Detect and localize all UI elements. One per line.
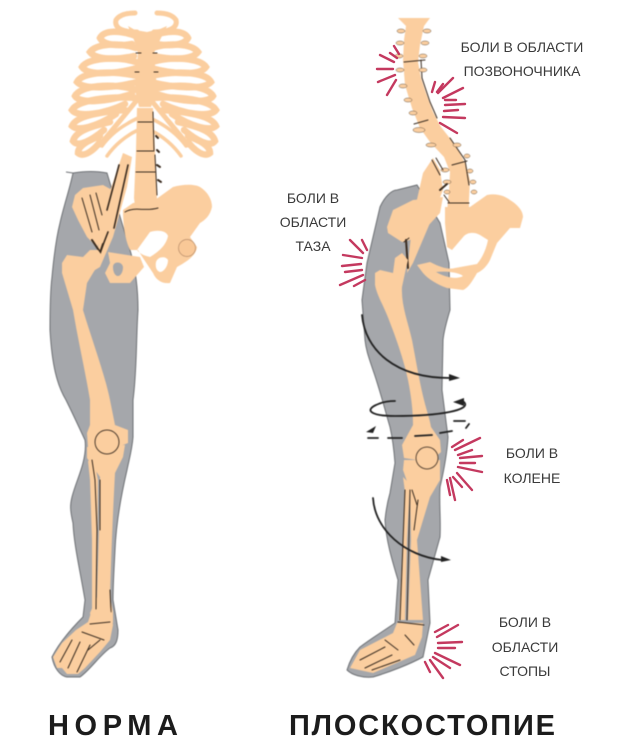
lumbar spine: normal <box>134 108 161 206</box>
pain burst: mid spine <box>432 78 465 133</box>
ilium and pelvic ring <box>417 194 523 290</box>
sternum <box>128 26 167 107</box>
pain burst: foot <box>425 625 462 678</box>
leg silhouette: normal <box>50 172 138 677</box>
label: pelvis pain: ОБЛАСТИ <box>280 214 346 230</box>
arrow: knee rotation ring <box>370 401 465 416</box>
heading: norm: НОРМА <box>48 710 178 742</box>
arrow: shin rotation <box>373 498 442 560</box>
label: knee pain: КОЛЕНЕ <box>504 470 560 486</box>
tibia: normal <box>87 430 125 623</box>
arrow: thigh rotation <box>362 315 450 378</box>
heading: flat foot: ПЛОСКОСТОПИЕ <box>289 710 555 742</box>
figure: normal skeleton <box>50 13 216 677</box>
spine: flat foot <box>395 18 477 212</box>
left ribs <box>72 13 138 156</box>
left pubic ramus <box>105 252 144 283</box>
foot: flat foot <box>350 622 424 673</box>
leg silhouette: flat foot <box>347 185 450 677</box>
label: foot pain: СТОПЫ <box>500 663 550 679</box>
tibia: flat foot <box>399 447 440 620</box>
psoas muscle <box>90 153 132 273</box>
label: pelvis pain: БОЛИ В <box>287 190 339 206</box>
left ilium <box>387 197 443 242</box>
patella <box>416 447 438 469</box>
label: spine pain: БОЛИ В ОБЛАСТИ <box>461 39 583 55</box>
psoas muscle <box>407 158 443 273</box>
pelvis: flat foot <box>387 158 523 290</box>
foot: normal <box>53 607 113 674</box>
pain burst: upper spine <box>377 46 399 95</box>
ribcage: normal <box>72 13 216 156</box>
fibula <box>88 460 98 610</box>
fibula <box>399 477 410 620</box>
pain burst: knee <box>447 438 482 500</box>
patella <box>95 430 119 454</box>
label: spine pain: ПОЗВОНОЧНИКА <box>464 63 581 79</box>
pelvis: normal <box>72 153 212 283</box>
arrows: leg rotation <box>362 315 469 562</box>
arrow: dashed lower ring <box>368 421 469 438</box>
right ribs <box>150 13 216 156</box>
pain burst: pelvis <box>340 240 367 286</box>
femur: normal <box>62 250 128 447</box>
femur: flat foot <box>375 253 441 462</box>
label: foot pain: ОБЛАСТИ <box>492 639 558 655</box>
left ilium <box>72 185 112 247</box>
figure: flat foot skeleton <box>347 18 523 677</box>
label: pelvis pain: ТАЗА <box>295 238 331 254</box>
label: knee pain: БОЛИ В <box>506 445 558 461</box>
label: foot pain: БОЛИ В <box>499 614 551 630</box>
vertebral processes <box>395 29 477 194</box>
right ilium and sacrum <box>123 185 212 283</box>
